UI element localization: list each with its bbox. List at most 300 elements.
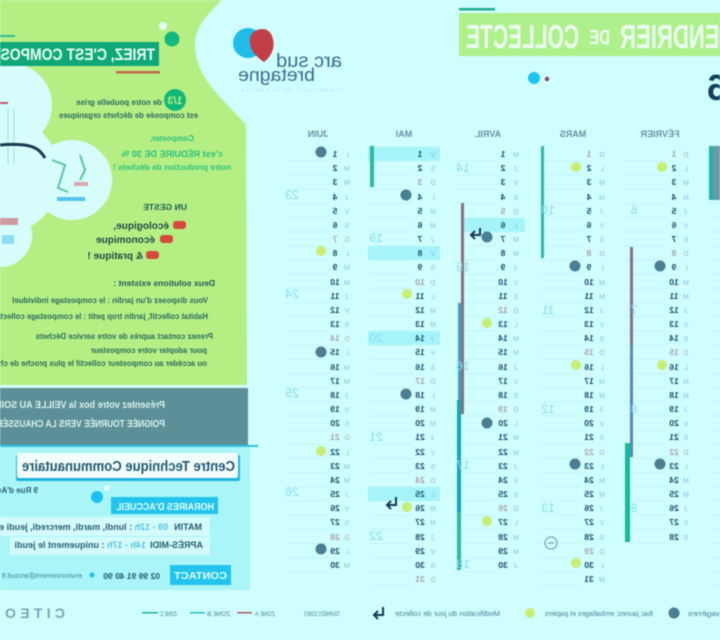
march weekdays: D [599, 251, 605, 258]
may weekdays: J [431, 435, 435, 442]
april weekdays: L [514, 223, 518, 230]
february weekdays: V [683, 223, 688, 230]
april weekdays: V [513, 180, 518, 187]
june weekdays: J [345, 294, 349, 301]
icon: blue dot [91, 491, 103, 503]
april weekdays: S [513, 393, 518, 400]
february weekdays: S [683, 237, 688, 244]
april weekdays: L [514, 520, 518, 527]
april numbers: 17 [498, 376, 508, 386]
february numbers: 4 [671, 192, 676, 202]
may weekdays [430, 152, 436, 584]
april numbers: 22 [498, 447, 508, 457]
may numbers: 13 [415, 319, 425, 329]
march weekdays: J [600, 506, 604, 513]
april numbers: 23 [498, 461, 508, 471]
may numbers: 30 [415, 560, 425, 570]
april numbers: 10 [498, 277, 508, 287]
february numbers: 8 [671, 248, 676, 258]
june weekdays: M [344, 379, 350, 386]
calendar [285, 129, 720, 586]
february weekdays: M [683, 294, 689, 301]
june weekdays: D [344, 535, 350, 542]
week numbers: 8 [630, 402, 637, 416]
february weekdays: L [684, 265, 688, 272]
march numbers: 16 [584, 362, 594, 372]
june numbers: 18 [330, 390, 340, 400]
may weekdays: L [431, 294, 435, 301]
text: un geste [87, 202, 187, 262]
february weekdays: S [683, 336, 688, 343]
april weekdays: L [514, 322, 518, 329]
may weekdays: L [431, 393, 435, 400]
june numbers: 23 [330, 461, 340, 471]
march numbers: 21 [584, 432, 594, 442]
june weekdays: L [345, 152, 349, 159]
may numbers: 24 [415, 475, 425, 485]
week numbers: 22 [369, 529, 383, 543]
heading: centre technique [16, 453, 240, 481]
june numbers: 1 [332, 149, 337, 159]
march numbers: 20 [584, 418, 594, 428]
february numbers: 23 [669, 461, 679, 471]
april numbers: 11 [498, 291, 508, 301]
april weekdays: V [513, 379, 518, 386]
june weekdays: M [344, 166, 350, 173]
february numbers: 16 [669, 362, 679, 372]
may numbers: 29 [415, 546, 425, 556]
march weekdays: M [599, 492, 605, 499]
april numbers: 12 [498, 305, 508, 315]
may numbers: 26 [415, 503, 425, 513]
march numbers: 17 [584, 376, 594, 386]
march weekdays: L [600, 166, 604, 173]
legend: zones [142, 611, 340, 618]
april weekdays: D [513, 308, 519, 315]
week numbers: 10 [541, 203, 555, 217]
month headers: AVRIL [474, 129, 501, 139]
june numbers: 22 [330, 447, 340, 457]
march weekdays: M [599, 180, 605, 187]
june weekdays: L [345, 450, 349, 457]
march numbers: 11 [584, 291, 594, 301]
week numbers: 18 [456, 557, 470, 571]
may numbers: 31 [415, 574, 425, 584]
june numbers: 5 [332, 206, 337, 216]
march weekdays: L [600, 365, 604, 372]
march weekdays: S [599, 237, 604, 244]
april numbers: 14 [498, 333, 508, 343]
may numbers: 1 [417, 149, 422, 159]
text: contact [1, 565, 231, 585]
text: composter: c'est RÉDUIRE DE 30 % [121, 149, 223, 159]
february numbers: 11 [669, 291, 678, 301]
april numbers: 27 [498, 517, 508, 527]
march numbers: 10 [584, 277, 594, 287]
text: composter: Composter, [150, 134, 194, 143]
march numbers: 26 [584, 503, 594, 513]
icon: blue dot [528, 72, 540, 84]
april numbers: 19 [498, 404, 508, 414]
may weekdays: S [430, 166, 435, 173]
june numbers: 25 [330, 489, 340, 499]
logo: arc sud bretagne: arc sud [276, 51, 342, 72]
april numbers: 25 [498, 489, 508, 499]
april numbers: 26 [498, 503, 508, 513]
april weekdays: S [513, 294, 518, 301]
panel: centre technique [0, 447, 250, 590]
march numbers: 24 [584, 475, 594, 485]
april weekdays: M [513, 435, 519, 442]
april weekdays: D [513, 209, 519, 216]
april weekdays: M [513, 549, 519, 556]
april numbers: 24 [498, 475, 508, 485]
may numbers: 4 [417, 192, 422, 202]
june numbers: 15 [330, 347, 340, 357]
may numbers: 3 [417, 177, 422, 187]
february weekdays: D [683, 350, 689, 357]
may numbers: 15 [415, 347, 425, 357]
may numbers: 16 [415, 362, 425, 372]
legend: zones: ZONE B [207, 612, 230, 618]
february weekdays: M [683, 478, 689, 485]
month headers: JUIN [308, 129, 328, 139]
june numbers: 21 [330, 432, 340, 442]
may weekdays: M [430, 223, 436, 230]
february numbers: 3 [671, 177, 676, 187]
text: contact: CONTACT [173, 570, 227, 582]
june weekdays: L [345, 549, 349, 556]
heading: horaires: HORAIRES D'ACCUEIL [116, 501, 214, 513]
march numbers: 1 [586, 149, 591, 159]
february weekdays: S [683, 535, 688, 542]
june weekdays: L [345, 251, 349, 258]
april weekdays: M [513, 336, 519, 343]
april weekdays: J [514, 365, 518, 372]
zone bars [370, 146, 720, 570]
march weekdays: D [599, 350, 605, 357]
march numbers: 6 [586, 220, 591, 230]
legend: modification: Modification du jour de collecte [395, 609, 500, 618]
march weekdays: S [599, 435, 604, 442]
may weekdays: J [431, 336, 435, 343]
february weekdays: L [684, 464, 688, 471]
february numbers: 26 [669, 503, 679, 513]
month headers [308, 129, 680, 139]
february weekdays: M [683, 195, 689, 202]
april weekdays: M [513, 251, 519, 258]
march numbers: 25 [584, 489, 594, 499]
february weekdays: L [684, 365, 688, 372]
icon: changed day arrows [387, 228, 480, 509]
june weekdays: D [344, 435, 350, 442]
may numbers: 27 [415, 517, 425, 527]
may numbers: 20 [415, 418, 425, 428]
june numbers: 20 [330, 418, 340, 428]
june weekdays: S [344, 421, 349, 428]
june weekdays: D [344, 237, 350, 244]
week numbers: 11 [541, 303, 554, 317]
may weekdays: M [430, 322, 436, 329]
april weekdays: D [513, 407, 519, 414]
march weekdays: V [599, 223, 604, 230]
legend: modification [374, 607, 500, 619]
text: solutions: Prenez contact auprès de votre service Déchets [35, 332, 213, 341]
february weekdays [683, 152, 689, 542]
legend: ordures [668, 608, 720, 618]
logo: arc sud bretagne [233, 28, 342, 92]
june numbers: 26 [330, 503, 340, 513]
may weekdays: J [431, 237, 435, 244]
heading: horaires [111, 497, 218, 514]
may numbers: 2 [417, 163, 422, 173]
march weekdays: S [599, 336, 604, 343]
february numbers: 1 [671, 149, 676, 159]
march weekdays: J [600, 407, 604, 414]
june weekdays: V [344, 506, 349, 513]
may weekdays: V [430, 251, 435, 258]
february weekdays: M [683, 393, 689, 400]
february weekdays: D [683, 450, 689, 457]
march weekdays: M [599, 195, 605, 202]
february numbers: 13 [669, 319, 679, 329]
june numbers: 24 [330, 475, 340, 485]
june numbers: 7 [332, 234, 337, 244]
may weekdays: M [430, 506, 436, 513]
may numbers: 5 [417, 206, 422, 216]
may weekdays: D [430, 180, 436, 187]
june weekdays: V [344, 407, 349, 414]
june weekdays: J [345, 195, 349, 202]
february weekdays: D [683, 251, 689, 258]
february numbers: 19 [669, 404, 679, 414]
march numbers: 3 [586, 177, 591, 187]
june weekdays: M [344, 180, 350, 187]
text: solutions: Vous disposez d'un jardin : le compostage individuel [12, 296, 208, 305]
title banner: DE [589, 27, 610, 49]
june weekdays [344, 152, 350, 570]
collection dots: ordures [316, 146, 666, 554]
february weekdays: J [684, 209, 688, 216]
text: one third [58, 89, 198, 120]
march numbers: 28 [584, 532, 594, 542]
april numbers: 6 [500, 220, 505, 230]
february weekdays: V [683, 520, 688, 527]
text: contact: 02 99 91 40 90 [103, 571, 160, 581]
june numbers: 17 [330, 376, 340, 386]
may numbers: 7 [417, 234, 422, 244]
may numbers: 9 [417, 262, 422, 272]
text: un geste: & pratique ! [87, 251, 143, 262]
may numbers: 10 [415, 277, 425, 287]
text: solutions [0, 278, 215, 368]
may weekdays: S [430, 265, 435, 272]
week numbers: 17 [456, 458, 470, 472]
february numbers: 12 [669, 305, 679, 315]
february weekdays: J [684, 407, 688, 414]
logo: arc sud bretagne: bretagne [238, 65, 315, 85]
march weekdays: L [600, 265, 604, 272]
june numbers: 2 [332, 163, 337, 173]
legend: emballages: Bac jaunes: emballages et papiers [545, 609, 653, 618]
may numbers: 17 [415, 376, 425, 386]
may weekdays: D [430, 379, 436, 386]
week numbers: 19 [369, 231, 383, 245]
month headers: MARS [560, 129, 586, 139]
may weekdays: J [431, 535, 435, 542]
may weekdays: M [430, 308, 436, 315]
june numbers: 8 [332, 248, 337, 258]
icon: white dot [159, 22, 167, 30]
april numbers: 21 [498, 432, 508, 442]
april numbers: 13 [498, 319, 508, 329]
june numbers: 11 [330, 291, 340, 301]
march numbers: 8 [586, 248, 591, 258]
april numbers: 3 [500, 177, 505, 187]
text: solutions: Deux solutions existent : [113, 278, 215, 288]
march numbers: 14 [584, 333, 594, 343]
text: composter [113, 134, 231, 172]
accent line [0, 35, 15, 37]
february numbers: 6 [671, 220, 676, 230]
february numbers: 9 [671, 262, 676, 272]
june numbers: 13 [330, 319, 340, 329]
february weekdays: M [683, 492, 689, 499]
june weekdays: V [344, 308, 349, 315]
week numbers: 9 [630, 501, 637, 515]
may numbers: 28 [415, 532, 425, 542]
march numbers: 27 [584, 517, 594, 527]
april numbers: 5 [500, 206, 505, 216]
may numbers: 8 [417, 248, 422, 258]
legend [5, 605, 720, 621]
march weekdays: V [599, 520, 604, 527]
week numbers: 26 [285, 485, 299, 499]
february numbers: 14 [669, 333, 679, 343]
april numbers: 18 [498, 390, 508, 400]
april numbers [498, 149, 508, 570]
week numbers: 14 [456, 161, 470, 175]
week numbers: 7 [630, 303, 637, 317]
month headers: FÉVRIER [640, 129, 680, 139]
june weekdays: M [344, 280, 350, 287]
may numbers [415, 149, 425, 584]
june numbers: 27 [330, 517, 340, 527]
may numbers: 23 [415, 461, 425, 471]
may weekdays: S [430, 563, 435, 570]
march weekdays: V [599, 322, 604, 329]
illustration: compost cloud [0, 63, 112, 267]
april weekdays: S [513, 195, 518, 202]
may weekdays: M [430, 520, 436, 527]
march numbers: 9 [586, 262, 591, 272]
may weekdays: V [430, 350, 435, 357]
april numbers: 4 [500, 192, 505, 202]
april weekdays: M [513, 450, 519, 457]
april weekdays: J [514, 166, 518, 173]
february numbers: 2 [671, 163, 676, 173]
icon: white dot [104, 485, 110, 491]
week numbers: 6 [630, 203, 637, 217]
june weekdays: M [344, 563, 350, 570]
week numbers: 16 [456, 359, 470, 373]
june numbers: 12 [330, 305, 340, 315]
march numbers: 30 [584, 560, 594, 570]
june weekdays: S [344, 223, 349, 230]
march weekdays: J [600, 209, 604, 216]
march numbers: 18 [584, 390, 594, 400]
march weekdays: M [599, 379, 605, 386]
text: horaires [0, 517, 210, 555]
february weekdays: J [684, 308, 688, 315]
april numbers: 8 [500, 248, 505, 258]
june numbers: 16 [330, 362, 340, 372]
february weekdays: V [683, 421, 688, 428]
february numbers: 15 [669, 347, 679, 357]
may numbers: 21 [415, 432, 425, 442]
week numbers: 13 [541, 501, 555, 515]
month headers: MAI [396, 129, 412, 139]
title banner [459, 8, 720, 56]
week numbers [285, 161, 637, 571]
week numbers: 12 [541, 402, 555, 416]
april weekdays: M [513, 535, 519, 542]
june numbers: 4 [332, 192, 337, 202]
april weekdays: M [513, 152, 519, 159]
may numbers: 19 [415, 404, 425, 414]
may weekdays: S [430, 464, 435, 471]
march numbers: 5 [586, 206, 591, 216]
may numbers: 18 [415, 390, 425, 400]
may weekdays: D [430, 280, 436, 287]
april numbers: 15 [498, 347, 508, 357]
may weekdays: M [430, 407, 436, 414]
legend: zones: ZONE A [255, 612, 275, 618]
april weekdays: S [513, 492, 518, 499]
march weekdays [599, 152, 605, 584]
february numbers: 7 [671, 234, 676, 244]
april weekdays [513, 152, 519, 570]
march weekdays: D [599, 152, 605, 159]
march weekdays: J [600, 308, 604, 315]
march weekdays: D [599, 450, 605, 457]
text: one third: est composée de déchets organiques [58, 111, 198, 120]
february numbers: 28 [669, 532, 679, 542]
june weekdays: M [344, 365, 350, 372]
week numbers: 21 [369, 430, 383, 444]
june weekdays: D [344, 336, 350, 343]
february numbers: 21 [669, 432, 679, 442]
april numbers: 9 [500, 262, 505, 272]
april weekdays: V [513, 280, 518, 287]
march weekdays: S [599, 535, 604, 542]
text: un geste: économique [96, 235, 155, 246]
accent line: red [116, 71, 160, 74]
may weekdays: S [430, 365, 435, 372]
february weekdays: D [683, 152, 689, 159]
week numbers: 15 [456, 260, 470, 274]
february weekdays: V [683, 322, 688, 329]
march weekdays: M [599, 294, 605, 301]
text: one third: de notre poubelle grise [76, 98, 162, 107]
icon: small dot [545, 77, 549, 81]
april numbers: 20 [498, 418, 508, 428]
may numbers: 12 [415, 305, 425, 315]
collection dots: emballages [316, 162, 667, 568]
logo: citeo: CITEO [5, 605, 65, 621]
june weekdays: V [344, 209, 349, 216]
logo: arc sud bretagne: communauté de communes [242, 87, 342, 92]
